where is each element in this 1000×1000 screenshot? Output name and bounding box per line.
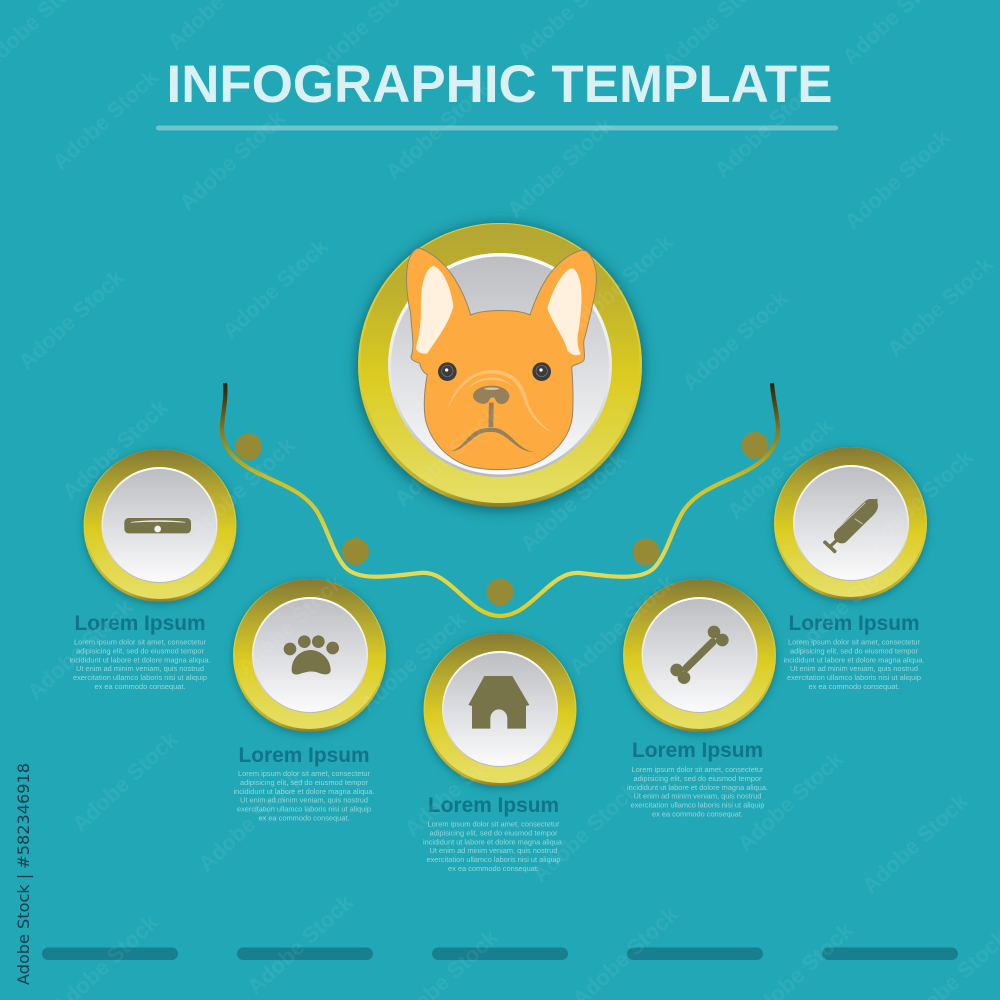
connector dot 5 bbox=[742, 432, 768, 459]
heading: Lorem Ipsum bbox=[238, 744, 370, 767]
watermarks: Adobe Stock bbox=[515, 446, 631, 557]
watermarks: Adobe Stock bbox=[193, 766, 309, 877]
body bbox=[784, 638, 924, 691]
badge 1 bbox=[84, 449, 236, 602]
body: ex ea commodo consequat. bbox=[448, 864, 539, 873]
watermarks: Adobe Stock bbox=[709, 72, 825, 183]
body: adipisicing elit, sed do eiusmod tempor bbox=[76, 646, 204, 655]
body bbox=[70, 638, 210, 691]
heading: Lorem Ipsum bbox=[632, 739, 763, 762]
body: exercitation ullamco laboris nisi ut aliquip bbox=[73, 673, 207, 682]
body: exercitation ullamco laboris nisi ut aliquip bbox=[787, 673, 921, 682]
watermarks: Adobe Stock bbox=[57, 394, 173, 505]
watermarks: Adobe Stock bbox=[184, 432, 300, 543]
body: Ut enim ad minim veniam, quis nostrud bbox=[240, 796, 368, 805]
body: incididunt ut labore et dolore magna aliqua. bbox=[423, 837, 564, 846]
body: adipisicing elit, sed do eiusmod tempor bbox=[430, 828, 558, 837]
watermarks: Adobe Stock bbox=[564, 569, 680, 680]
body: ex ea commodo consequat. bbox=[652, 810, 743, 818]
body: adipisicing elit, sed do eiusmod tempor bbox=[240, 778, 368, 787]
heading: Lorem Ipsum bbox=[428, 794, 559, 817]
body: adipisicing elit, sed do eiusmod tempor bbox=[634, 774, 762, 783]
connector dot 2 bbox=[342, 538, 369, 565]
badge 4 bbox=[623, 579, 776, 732]
text block 3 bbox=[423, 794, 564, 873]
watermarks: Adobe Stock bbox=[174, 105, 290, 216]
watermarks: Adobe Stock bbox=[862, 444, 978, 555]
watermarks: Adobe Stock bbox=[380, 74, 496, 185]
title underline bbox=[156, 126, 838, 130]
watermarks: Adobe Stock bbox=[839, 124, 955, 235]
watermarks: Adobe Stock bbox=[722, 413, 838, 524]
body: Ut enim ad minim veniam, quis nostrud bbox=[430, 846, 558, 855]
body: exercitation ullamco laboris nisi ut aliquip bbox=[630, 801, 764, 810]
connector dot 3 bbox=[486, 578, 514, 606]
body: Ut enim ad minim veniam, quis nostrud bbox=[790, 664, 918, 673]
watermarks: Adobe Stock bbox=[355, 606, 471, 717]
body: incididunt ut labore et dolore magna aliqua. bbox=[627, 783, 768, 792]
stock id label: Adobe Stock | #582346918 bbox=[14, 763, 33, 985]
body bbox=[234, 769, 374, 822]
watermarks: Adobe Stock bbox=[882, 251, 998, 362]
watermarks: Adobe Stock bbox=[787, 549, 903, 660]
badge 3 bbox=[424, 633, 576, 786]
connector dot 4 bbox=[632, 538, 660, 566]
body: incididunt ut labore et dolore magna aliqua. bbox=[70, 655, 210, 664]
body: Lorem ipsum dolor sit amet, consectetur bbox=[238, 769, 370, 778]
icon: syringe bbox=[825, 499, 878, 551]
body: Ut enim ad minim veniam, quis nostrud bbox=[634, 792, 762, 801]
heading: Lorem Ipsum bbox=[788, 612, 920, 635]
watermarks: Adobe Stock bbox=[232, 569, 348, 680]
watermarks: Adobe Stock bbox=[217, 233, 333, 344]
connector dot 1 bbox=[235, 434, 262, 460]
body: ex ea commodo consequat. bbox=[94, 682, 186, 691]
watermarks: Adobe Stock bbox=[22, 594, 138, 705]
badge 5 bbox=[774, 447, 927, 600]
body: ex ea commodo consequat. bbox=[808, 682, 900, 691]
body bbox=[423, 820, 564, 873]
watermarks: Adobe Stock bbox=[857, 788, 973, 899]
text block 1 bbox=[70, 612, 210, 691]
icon: bone bbox=[670, 626, 729, 684]
badge 2 bbox=[233, 579, 386, 732]
watermarks: Adobe Stock bbox=[527, 777, 643, 888]
body: ex ea commodo consequat. bbox=[258, 814, 350, 822]
watermarks: Adobe Stock bbox=[732, 746, 848, 857]
body: incididunt ut labore et dolore magna aliqua. bbox=[234, 787, 374, 796]
watermarks: Adobe Stock bbox=[399, 731, 515, 842]
watermarks: Adobe Stock bbox=[47, 64, 163, 175]
watermarks: Adobe Stock bbox=[67, 726, 183, 837]
connecting curve bbox=[222, 383, 778, 616]
icon: paw bbox=[284, 635, 339, 674]
footer bars bbox=[42, 948, 958, 960]
french bulldog head bbox=[407, 248, 596, 470]
central badge bbox=[358, 223, 642, 507]
title: INFOGRAPHIC TEMPLATE bbox=[166, 55, 833, 114]
body: Lorem ipsum dolor sit amet, consectetur bbox=[632, 765, 764, 774]
watermarks: Adobe Stock bbox=[13, 264, 129, 375]
body: exercitation ullamco laboris nisi ut aliquip bbox=[426, 855, 560, 864]
text block 2 bbox=[234, 744, 374, 822]
body bbox=[627, 765, 768, 818]
watermarks: Adobe Stock bbox=[389, 401, 505, 512]
icon: dog house bbox=[468, 676, 529, 729]
text block 5 bbox=[784, 612, 924, 691]
body: Lorem ipsum dolor sit amet, consectetur bbox=[788, 638, 920, 646]
body: adipisicing elit, sed do eiusmod tempor bbox=[790, 646, 918, 655]
watermarks: Adobe Stock bbox=[677, 285, 793, 396]
icon: collar bbox=[124, 518, 191, 533]
body: Ut enim ad minim veniam, quis nostrud bbox=[76, 664, 204, 673]
text block 4 bbox=[627, 739, 768, 818]
watermarks: Adobe Stock bbox=[502, 112, 618, 223]
body: exercitation ullamco laboris nisi ut aliquip bbox=[237, 805, 371, 814]
body: incididunt ut labore et dolore magna aliqua. bbox=[784, 655, 924, 664]
body: Lorem ipsum dolor sit amet, consectetur bbox=[428, 820, 560, 828]
watermarks: Adobe Stock bbox=[562, 229, 678, 340]
body: Lorem ipsum dolor sit amet, consectetur bbox=[74, 638, 206, 646]
heading: Lorem Ipsum bbox=[74, 612, 206, 635]
watermarks: Adobe Stock bbox=[242, 889, 358, 1000]
